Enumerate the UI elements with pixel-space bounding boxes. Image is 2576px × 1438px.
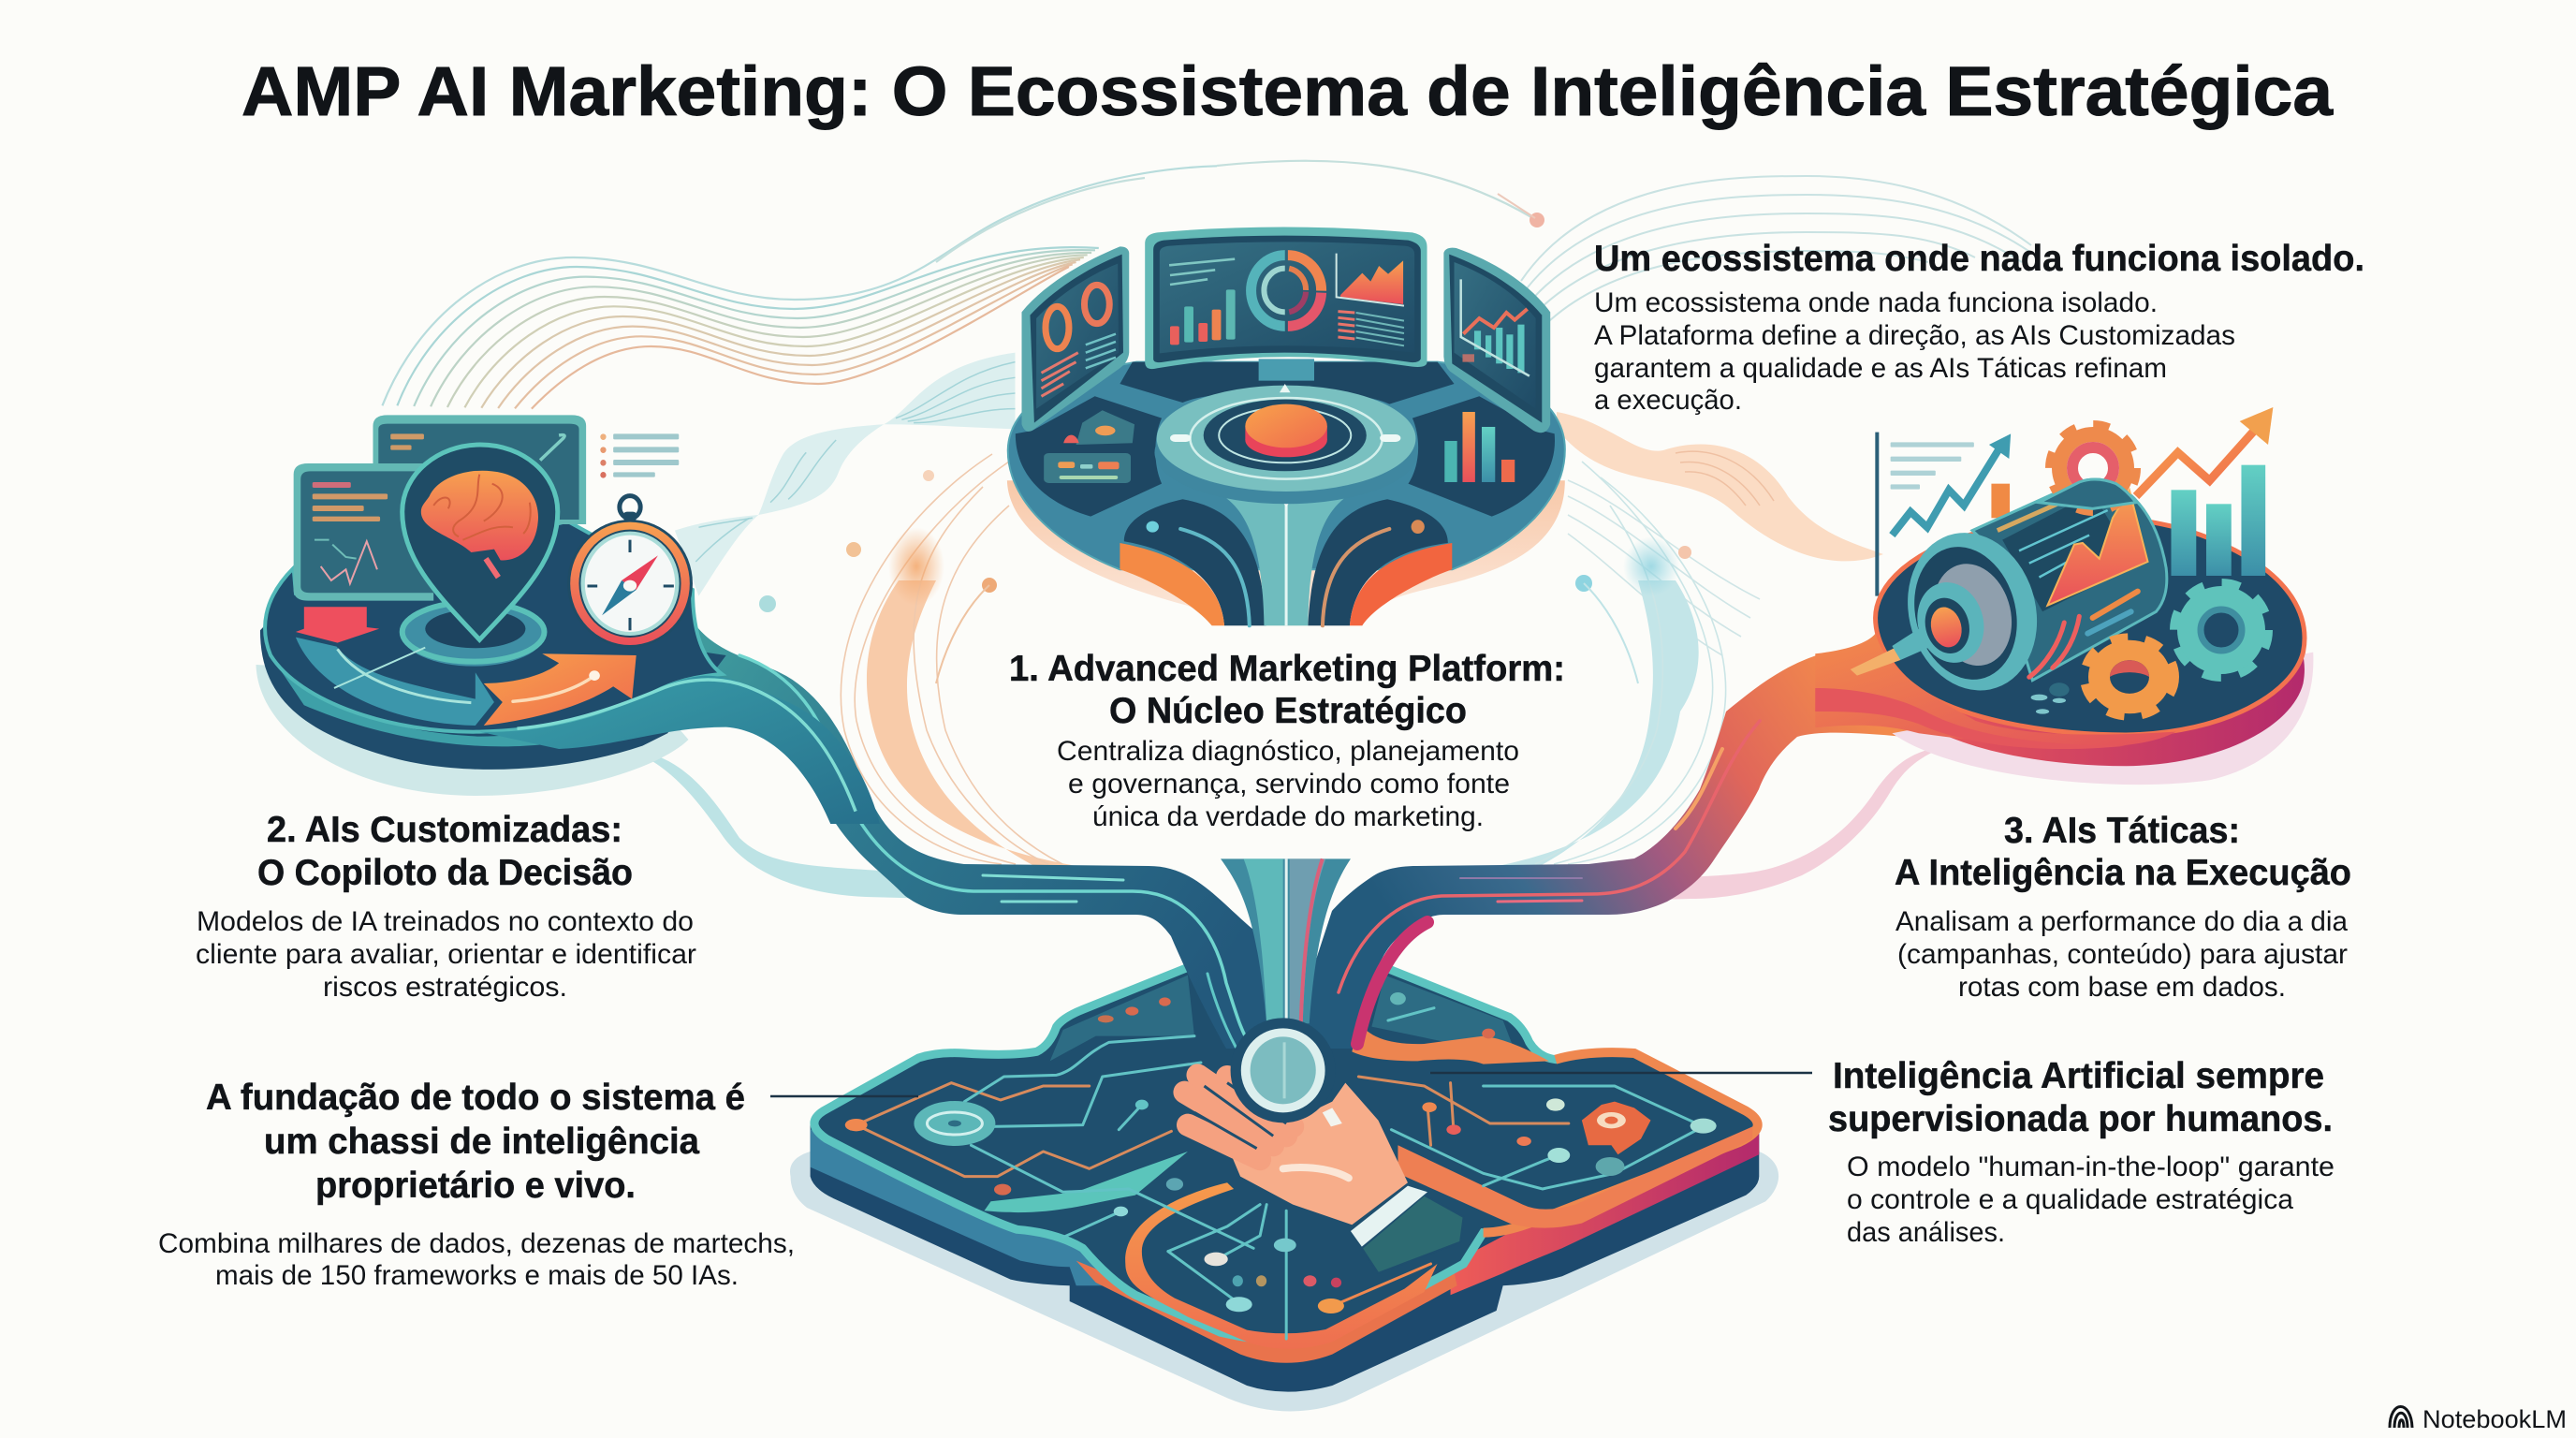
text block: foundation: um chassi de inteligência [264, 1122, 699, 1162]
orange bar [1991, 484, 2010, 518]
hub [1154, 401, 1418, 504]
text block: advanced marketing platform: O Núcleo Estratégico [1109, 691, 1467, 731]
text block: custom AIs: riscos estratégicos. [323, 972, 567, 1003]
panel: advanced marketing platform [1007, 227, 1565, 625]
text block: custom AIs: cliente para avaliar, orientar e identificar [196, 939, 696, 970]
left river [642, 627, 1275, 1049]
panel traces [1180, 529, 1389, 625]
text block: tactical AIs: 3. AIs Táticas: [2004, 811, 2240, 851]
disc shadow [256, 665, 689, 796]
orange stream right [1350, 543, 1452, 625]
title: AMP AI Marketing: O Ecossistema de Inteligência Estratégica [242, 52, 2334, 130]
text block: advanced marketing platform: Centraliza diagnóstico, planejamento [1057, 736, 1519, 767]
left monitor [1022, 246, 1129, 432]
icon: orange gear [2090, 643, 2169, 711]
flame chart [2047, 490, 2148, 606]
dark segment: bottom right [1308, 499, 1448, 625]
text block: tactical AIs: Analisam a performance do dia a dia [1895, 906, 2348, 937]
logo: NotebookLM: NotebookLM [2422, 1405, 2567, 1433]
eye emblem [914, 1101, 995, 1146]
secondary ribbons under side discs [626, 746, 1949, 901]
platform shadow [790, 1152, 1778, 1412]
text block: tactical AIs [1895, 811, 2351, 1003]
right panel bars [1444, 412, 1515, 482]
text block: ecosystem: Um ecossistema onde nada funciona isolado. [1594, 239, 2364, 279]
river band flowing out of the disc rim [479, 676, 880, 824]
text block: human supervision: das análises. [1847, 1217, 2005, 1248]
twisted ribbon: left [675, 353, 1015, 596]
teal band [984, 1152, 1188, 1212]
dark segment: left [1016, 396, 1162, 517]
peach base shadow [1007, 480, 1565, 625]
text block: ecosystem [1594, 239, 2364, 416]
area chart [1340, 260, 1403, 304]
text block: advanced marketing platform: única da verdade do marketing. [1092, 801, 1484, 832]
orange river on surface [1352, 1020, 1549, 1064]
left axis and lines [1877, 433, 1974, 596]
disc side [260, 593, 726, 770]
teal trend arrow [1892, 433, 2011, 536]
text block: ecosystem: A Plataforma define a direção, as AIs Customizadas [1594, 320, 2235, 351]
text block: tactical AIs: rotas com base em dados. [1958, 972, 2286, 1003]
light stem [1187, 468, 1385, 625]
text block: tactical AIs: A Inteligência na Execução [1895, 853, 2351, 893]
text block: custom AIs [196, 810, 696, 1003]
text block: ecosystem: a execução. [1594, 385, 1742, 416]
platform blue side band [811, 1130, 1109, 1285]
orange curved arrow [484, 653, 637, 726]
platform top surface [814, 967, 1758, 1341]
nozzle [1851, 648, 1900, 676]
back monitor [373, 415, 586, 524]
text block: advanced marketing platform [1009, 649, 1565, 832]
accent dots [759, 194, 1691, 683]
connector line: right callout [1430, 1072, 1812, 1074]
table lines [1356, 313, 1404, 345]
cylinder face [1893, 521, 2052, 702]
teal arc ribbon [1498, 462, 1726, 866]
peach ribbon: right [1557, 412, 1883, 655]
text block: human supervision: Inteligência Artificial sempre [1833, 1056, 2324, 1096]
dark segment: bottom left [1124, 499, 1266, 625]
donut chart [1251, 256, 1322, 326]
orange stream left [1120, 543, 1224, 625]
center monitor [1145, 227, 1427, 369]
orange right edge [1484, 1052, 1758, 1233]
front monitor [294, 463, 433, 601]
orange loop trace [1125, 1182, 1438, 1349]
connector line: left callout [770, 1095, 918, 1097]
platform magenta side band [1451, 1130, 1759, 1295]
bar chart [1170, 289, 1236, 345]
bars [2171, 465, 2265, 576]
disc shadow [1892, 653, 2313, 785]
platform orange lower edge [1076, 1255, 1457, 1363]
right monitor [1443, 248, 1550, 433]
panel: foundation circuit platform [790, 967, 1778, 1412]
text block: advanced marketing platform: 1. Advanced Marketing Platform: [1009, 649, 1565, 689]
orange right band [1398, 1126, 1752, 1228]
bullet list [600, 433, 679, 478]
sleeve [1362, 1196, 1464, 1273]
text block: foundation: mais de 150 frameworks e mais de 50 IAs. [215, 1260, 739, 1291]
disc top [265, 521, 722, 732]
text block: foundation: Combina milhares de dados, dezenas de martechs, [158, 1228, 795, 1259]
center trunk [1221, 858, 1351, 1027]
text block: foundation [158, 1078, 795, 1291]
disc top [1876, 517, 2305, 735]
text block: advanced marketing platform: e governança, servindo como fonte [1068, 769, 1510, 800]
icon: teal gear [2181, 590, 2261, 670]
disc side [1876, 548, 2305, 766]
text block: human supervision [1828, 1056, 2334, 1248]
text block: custom AIs: 2. AIs Customizadas: [267, 810, 622, 850]
orange trend arrow [2136, 407, 2273, 496]
cylinder overlap above gear [2039, 479, 2136, 508]
right river [1296, 646, 1938, 1049]
text block: human supervision: supervisionada por humanos. [1828, 1099, 2333, 1139]
monitor stand [1259, 359, 1314, 381]
text block: human supervision: O modelo "human-in-the-loop" garante [1847, 1152, 2334, 1182]
dark segment: right [1408, 396, 1555, 517]
river band flowing out of the disc rim [1815, 634, 2176, 747]
palm [1221, 1083, 1408, 1225]
lighter upper lobes [1050, 976, 1516, 1061]
panel: custom AIs disc [256, 415, 880, 824]
text block: custom AIs: Modelos de IA treinados no contexto do [197, 906, 694, 937]
flowing wave lines: top left [382, 161, 1531, 409]
icon: compass [567, 496, 693, 648]
ring under pin [402, 601, 545, 667]
red arrow [296, 607, 379, 643]
icon: orange gear top [2056, 431, 2130, 506]
text block: ecosystem: Um ecossistema onde nada funciona isolado. [1594, 287, 2158, 318]
disc body [1008, 362, 1565, 569]
text block: foundation: A fundação de todo o sistema é [206, 1078, 745, 1118]
left panel widgets [1044, 410, 1134, 483]
magnifier handle [1329, 1114, 1362, 1163]
teal curved arrow [296, 638, 494, 726]
orange gear on platform [1582, 1102, 1651, 1154]
text block: custom AIs: O Copiloto da Decisão [257, 853, 633, 893]
text block: human supervision: o controle e a qualidade estratégica [1847, 1184, 2293, 1215]
text block: ecosystem: garantem a qualidade e as AIs Táticas refinam [1594, 353, 2167, 384]
platform dark base [811, 1123, 1759, 1392]
magnifier lens [1231, 1018, 1336, 1123]
panel: tactical AIs disc [1815, 407, 2313, 785]
icon: brain pin [402, 445, 558, 639]
cylinder body [1972, 479, 2167, 681]
dark segment: top [1120, 362, 1455, 404]
text block: tactical AIs: (campanhas, conteúdo) para ajustar [1897, 939, 2348, 970]
circuit nodes [845, 992, 1717, 1313]
icon: hand holding magnifying glass [1184, 1018, 1464, 1273]
flowing wave lines: top right arcs [1521, 176, 2031, 346]
fingers [1184, 1075, 1293, 1159]
orange arc ribbon [841, 454, 1076, 866]
hub button [1245, 423, 1327, 457]
circuit traces [856, 1008, 1704, 1339]
small marks [2031, 682, 2070, 714]
text block: foundation: proprietário e vivo. [315, 1166, 636, 1206]
text bars [1169, 259, 1235, 285]
